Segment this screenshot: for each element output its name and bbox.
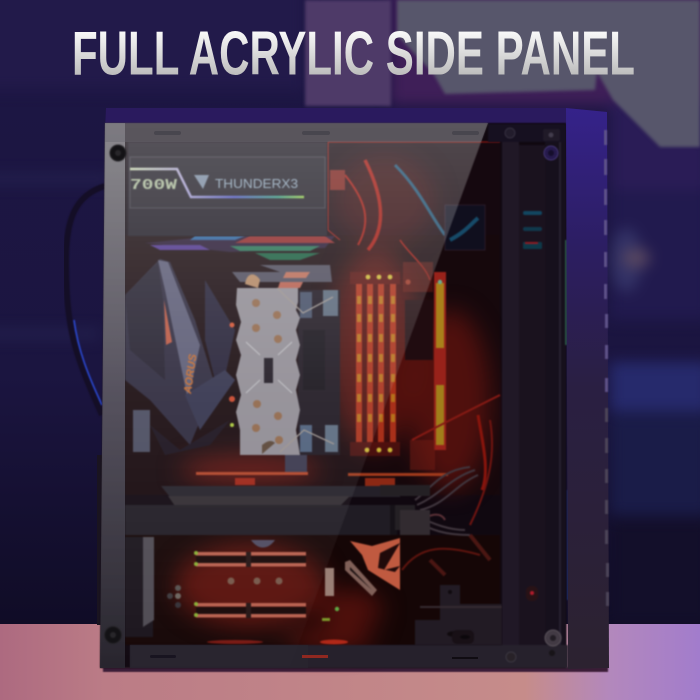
PC case: [100, 108, 609, 669]
table surface: [0, 624, 700, 700]
acrylic left strip: [100, 123, 125, 668]
fan behind cooler: [285, 290, 340, 473]
lower left board: [125, 537, 181, 637]
top lid: [105, 108, 607, 130]
upper chamber red lighting: [328, 142, 500, 272]
top frame band: [105, 123, 488, 142]
bottom frame: [130, 645, 568, 668]
vent slots: [523, 211, 542, 249]
top heatsink bracket: [232, 265, 332, 288]
PSU brand: THUNDERX3: [215, 177, 298, 191]
acrylic glass reflection: [100, 123, 488, 668]
side panel perforations: [604, 130, 609, 606]
PSU wattage: 700W: [130, 177, 177, 194]
cable bundle: [402, 395, 500, 575]
graphics card: [125, 485, 430, 535]
red LED: [526, 586, 538, 601]
upper cables: [328, 142, 500, 280]
power cable: [66, 186, 105, 415]
screws: [104, 128, 561, 662]
case side panel: [566, 108, 609, 669]
PSU bracket: [415, 585, 502, 645]
AORUS eagle logo: [325, 538, 400, 596]
ThunderX3 logo: [194, 175, 209, 189]
PSU light line: [130, 169, 304, 197]
red glows: [175, 155, 490, 648]
VRM strip: [405, 272, 446, 450]
CPU cooler fin stack: [236, 288, 300, 455]
bottom frame band: [130, 645, 478, 668]
PCIe and M.2 slots: [194, 540, 306, 618]
rear IO edge: [97, 455, 103, 625]
red LED dots: [229, 322, 235, 427]
RAM modules: [350, 272, 400, 456]
vent slots on top frame: [154, 131, 479, 135]
retention clips: [277, 288, 334, 452]
rgb heatsink band: [145, 236, 335, 260]
interior: [100, 123, 566, 668]
RGB edge light: [565, 240, 567, 345]
AORUS vertical mark: AORUS: [182, 353, 200, 395]
left motherboard shroud: [125, 259, 235, 455]
PSU: [128, 142, 327, 236]
rear steel columns: [130, 124, 568, 668]
board texture: [196, 262, 448, 487]
small LEDs: [207, 607, 348, 644]
